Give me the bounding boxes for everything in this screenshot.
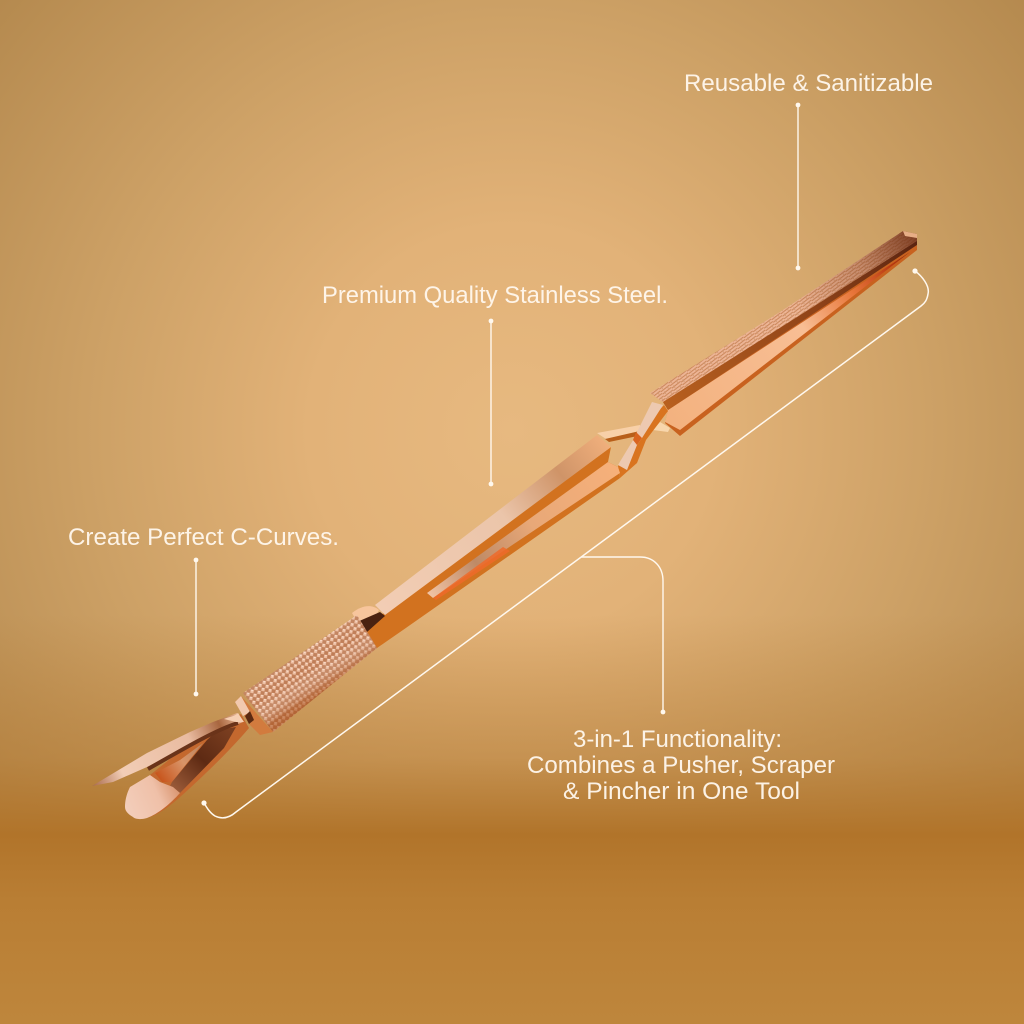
inner orange hollow	[155, 743, 203, 782]
scoop outer orange body	[147, 714, 249, 818]
pusher and scraper head	[92, 713, 249, 819]
upper blade	[92, 713, 243, 786]
crossover joint	[597, 402, 670, 478]
callout: 3-in-1 Functionality: Combines a Pusher, Scraper	[527, 752, 835, 779]
callout: 3-in-1 Functionality	[527, 557, 835, 805]
knurled handle	[235, 606, 385, 735]
callout: Reusable & Sanitizable: Reusable & Sanitizable	[684, 70, 933, 97]
callout: Create Perfect C-Curves: Create Perfect C-Curves.	[68, 524, 339, 551]
blade dark underside	[148, 723, 238, 769]
callout: 3-in-1 Functionality: & Pincher in One Tool	[563, 778, 800, 805]
callout: Reusable & Sanitizable	[684, 70, 933, 270]
neck highlight	[224, 713, 244, 722]
pale scoop bowl	[125, 775, 180, 819]
pincher arms	[362, 435, 620, 648]
callout: Premium Quality Stainless Steel	[322, 282, 668, 486]
pincher blade with textured grip	[650, 231, 917, 436]
dark reflection stem	[170, 727, 236, 793]
callout: Create Perfect C-Curves	[68, 524, 339, 696]
callout: Premium Quality Stainless Steel: Premium Quality Stainless Steel.	[322, 282, 668, 309]
product: 3-in-1 nail tool	[92, 231, 917, 819]
callout: 3-in-1 Functionality: 3-in-1 Functionality:	[573, 726, 782, 753]
length bracket line along the tool	[201, 268, 928, 818]
